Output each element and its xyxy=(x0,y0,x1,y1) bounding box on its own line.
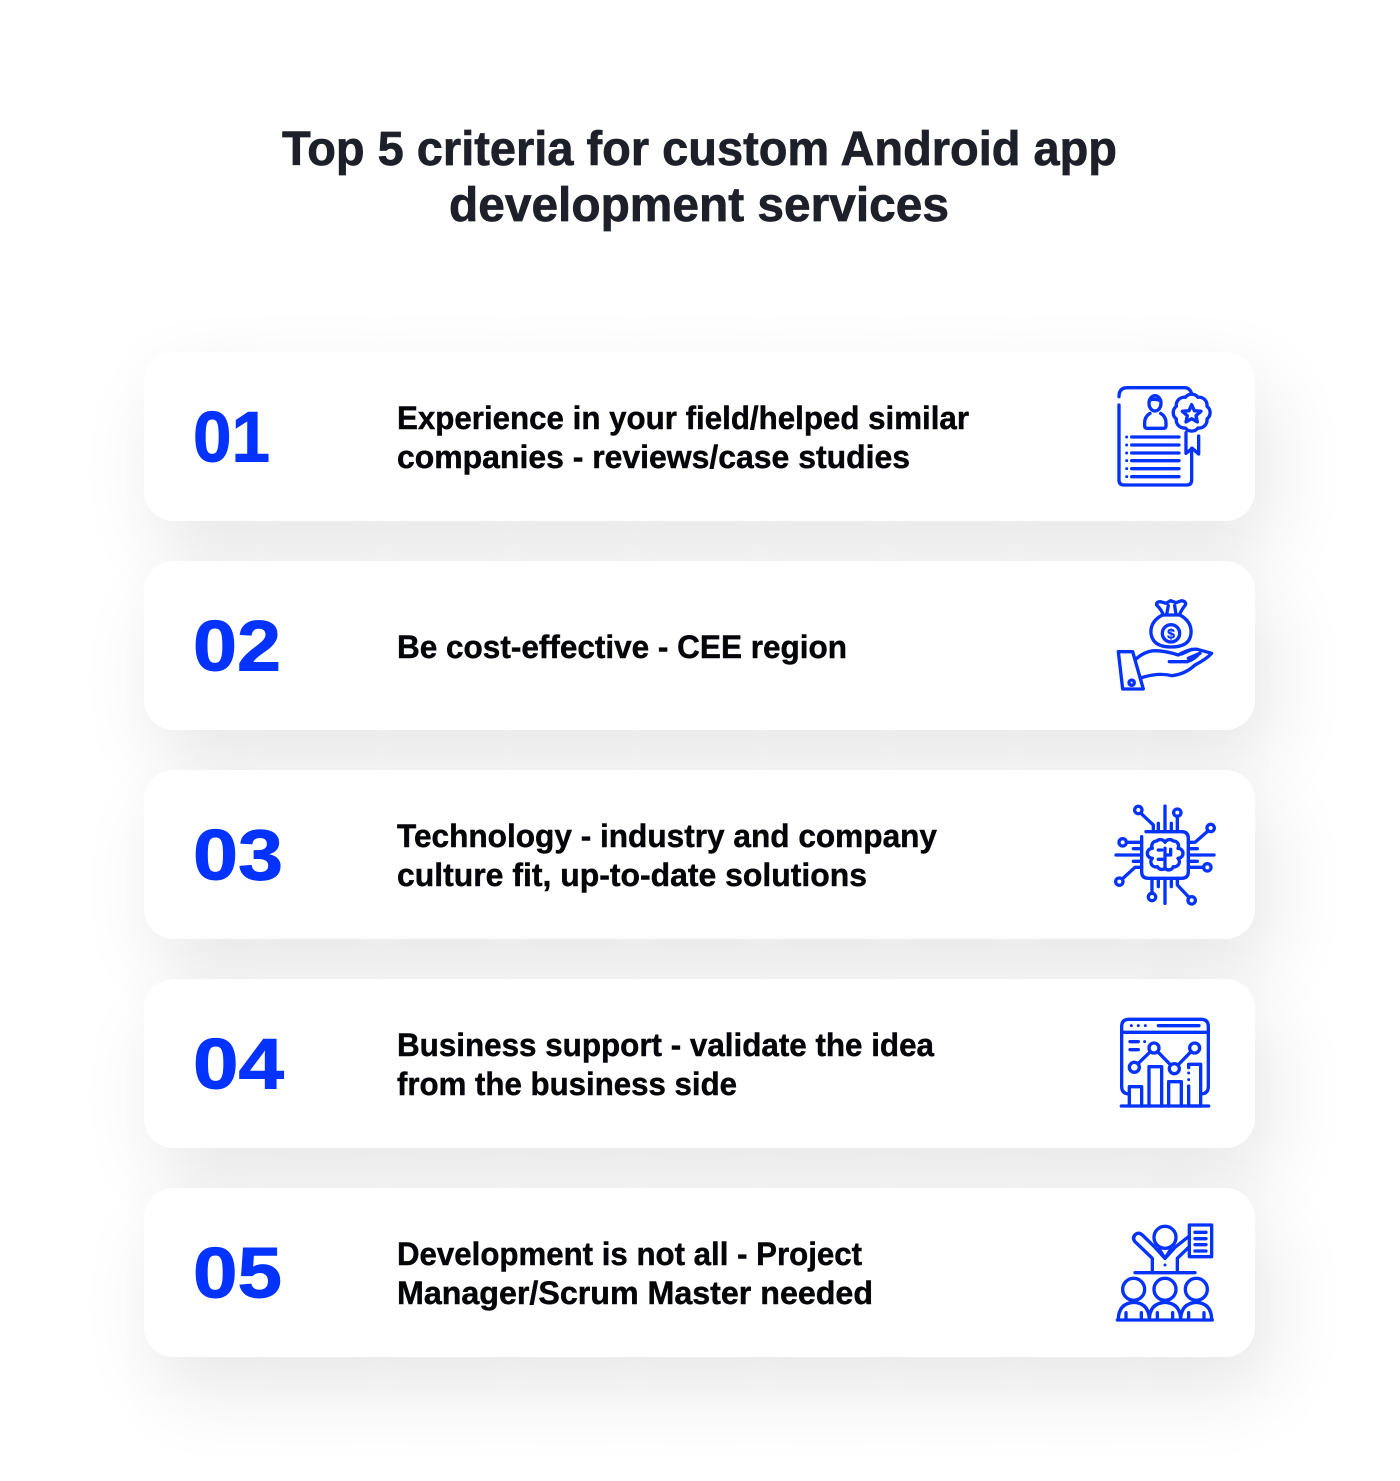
icon: chip with brain xyxy=(1116,806,1214,904)
icon: presenter and team xyxy=(1117,1225,1212,1320)
text: development xyxy=(397,1236,873,1311)
number 01: 01 xyxy=(193,398,270,478)
icon: certificate with ribbon xyxy=(1119,388,1210,485)
panel: criterion 01 xyxy=(144,352,1255,521)
number 02: 02 xyxy=(193,608,281,686)
text: development: Manager/Scrum Master needed xyxy=(397,1275,873,1311)
panel: criterion 02 xyxy=(144,561,1255,730)
text: business support xyxy=(397,1027,934,1102)
text: experience xyxy=(397,400,969,475)
panel: criterion 03 xyxy=(144,770,1255,939)
text: business support: from the business side xyxy=(397,1066,737,1102)
text: experience: Experience in your field/helped similar xyxy=(397,400,969,436)
number 03: 03 xyxy=(193,816,283,896)
number 04: 04 xyxy=(193,1026,285,1104)
title: Top 5 criteria for custom Android app xyxy=(282,123,1117,176)
text: technology xyxy=(397,818,937,893)
panel: criterion 04 xyxy=(144,979,1255,1148)
panel: criterion 05 xyxy=(144,1188,1255,1357)
text: technology: culture fit, up-to-date solutions xyxy=(397,857,867,893)
text: technology: Technology - industry and company xyxy=(397,818,937,854)
icon: hand holding money bag xyxy=(1118,601,1212,689)
text: cost-effective: Be cost-effective - CEE region xyxy=(397,629,847,665)
text: experience: companies - reviews/case studies xyxy=(397,439,910,475)
title: development services xyxy=(449,179,949,232)
number 05: 05 xyxy=(193,1234,282,1314)
title xyxy=(282,123,1117,232)
text: business support: Business support - validate the idea xyxy=(397,1027,934,1063)
icon: dashboard chart xyxy=(1121,1019,1209,1106)
icon: hand holding money bag: $ xyxy=(1167,625,1175,641)
text: development: Development is not all - Project xyxy=(397,1236,862,1272)
